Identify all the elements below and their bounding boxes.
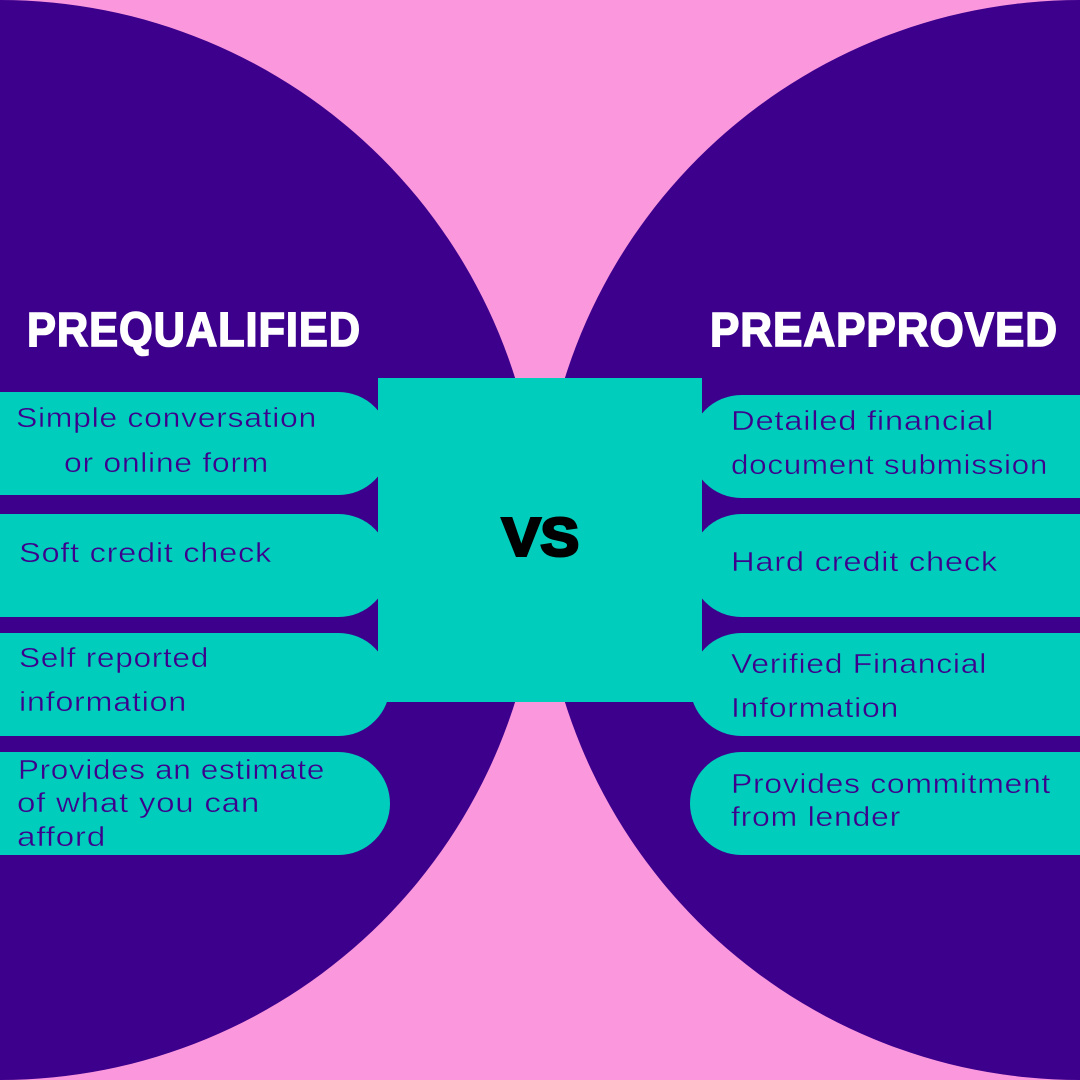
panel: preapproved item 2: Hard credit check: [731, 546, 998, 577]
panel: preapproved item 3: [690, 633, 1080, 736]
panel: preapproved item 4: [690, 752, 1080, 855]
heading: prequalified: PREQUALIFIED: [27, 304, 361, 357]
panel: prequalified item 4: of what you can: [17, 787, 260, 818]
panel: prequalified item 1: [0, 392, 390, 495]
panel: prequalified item 4: afford: [17, 821, 106, 852]
panel: preapproved item 2: [690, 514, 1080, 617]
panel: preapproved item 1: [690, 395, 1080, 498]
panel: prequalified item 3: Self reported: [19, 642, 209, 673]
center vs square: [378, 378, 702, 702]
panel: prequalified item 4: [0, 752, 390, 855]
panel: prequalified item 4: Provides an estimate: [18, 754, 325, 785]
panel: prequalified item 1: or online form: [64, 447, 269, 478]
right purple semicircle: [540, 0, 1080, 1080]
panel: prequalified item 1: Simple conversation: [16, 402, 317, 433]
panel: preapproved item 4: Provides commitment: [731, 768, 1051, 799]
panel: preapproved item 1: document submission: [731, 449, 1048, 480]
panel: prequalified item 2: [0, 514, 390, 617]
left purple semicircle: [0, 0, 540, 1080]
panel: prequalified item 3: information: [19, 686, 187, 717]
heading: preapproved: PREAPPROVED: [710, 304, 1058, 357]
vs label: VS: [502, 508, 579, 568]
panel: prequalified item 2: Soft credit check: [19, 537, 272, 568]
panel: prequalified item 3: [0, 633, 390, 736]
panel: preapproved item 3: Verified Financial: [731, 648, 987, 679]
panel: preapproved item 4: from lender: [731, 801, 901, 832]
panel: preapproved item 3: Information: [731, 692, 899, 723]
panel: preapproved item 1: Detailed financial: [731, 405, 994, 436]
